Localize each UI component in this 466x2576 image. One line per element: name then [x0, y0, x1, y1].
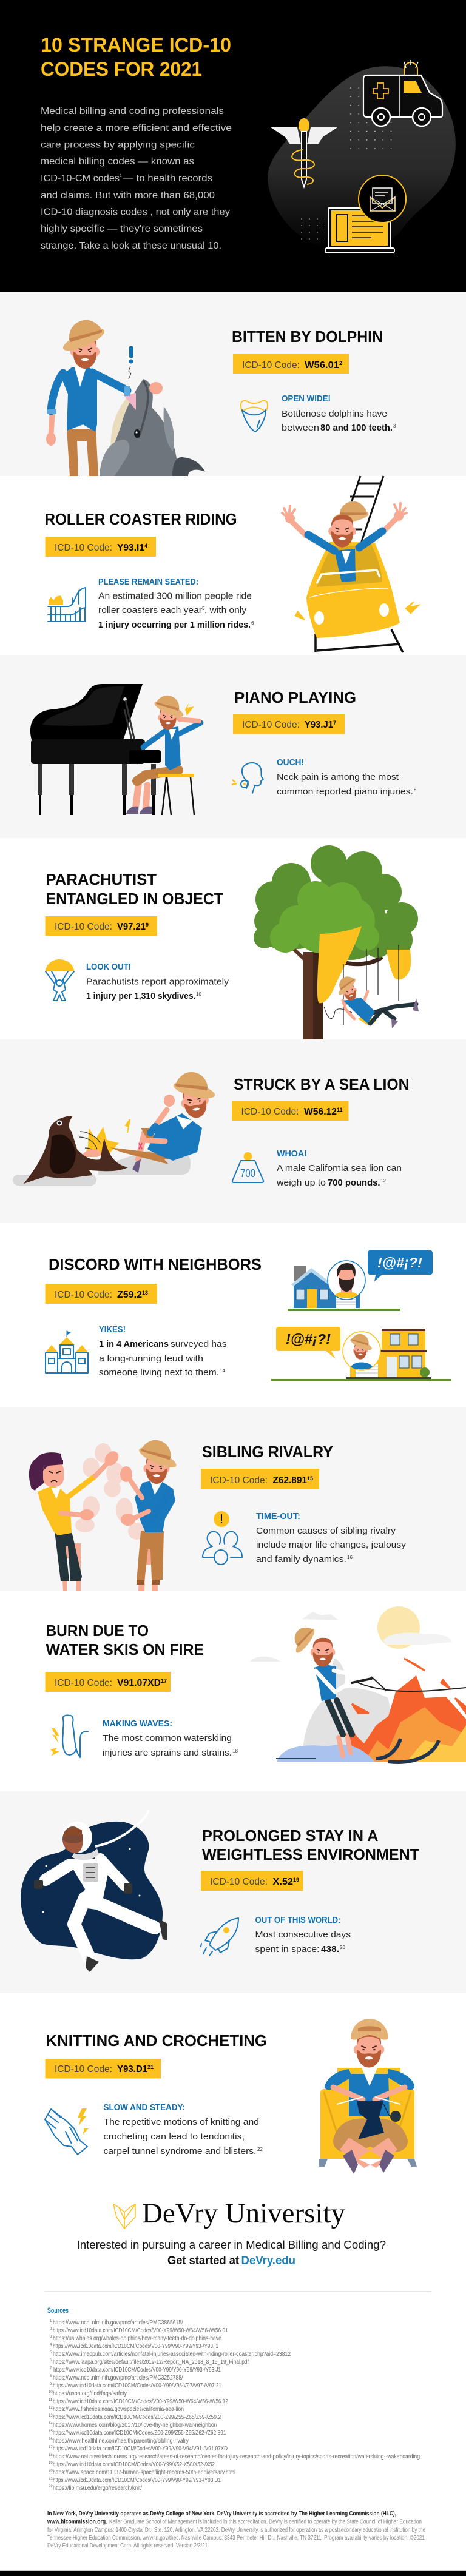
heading [46, 1622, 204, 1659]
fact text: Common causes of sibling rivalry [256, 1526, 396, 1536]
fact text: 5 [202, 606, 205, 611]
heading: ROLLER COASTER RIDING [45, 510, 237, 528]
call to action [76, 2238, 386, 2267]
sources list: 13 [49, 2414, 53, 2418]
heading: PARACHUTIST [46, 870, 157, 888]
fact text: roller coasters each year [98, 606, 202, 615]
illustration: sea lion striking man [13, 1068, 221, 1186]
illustration: man knitting in chair [319, 2019, 417, 2174]
sources list: https://www.nationwidechildrens.org/research/areas-of-research/center-for-injury-research-and-policy/injury-topics/sports-recreation/waterskiing--wakeboarding [53, 2454, 420, 2460]
heading: PIANO PLAYING [234, 688, 356, 706]
accreditation fine print: DeVry Educational Development Corp. All rights reserved. Version 2/3/21. [47, 2542, 209, 2549]
sources list: 21 [49, 2477, 53, 2481]
code badge: 13 [142, 1290, 148, 1296]
fact text: OUCH! [277, 758, 304, 768]
illustration: yellow house with man [271, 1327, 451, 1381]
heading [46, 870, 223, 908]
icon: tooth [241, 401, 268, 432]
code badge: Y93.I1 [117, 543, 144, 553]
sources list: https://www.icd10data.com/ICD10CM/Codes/V00-Y99/V95-V97/V97-/V97.21 [53, 2383, 221, 2389]
code badge [45, 1284, 157, 1304]
call to action: Get started at [167, 2255, 240, 2267]
fact text: 700 pounds. [328, 1178, 380, 1188]
sources list: 10 [49, 2390, 53, 2394]
intro text: help create a more efficient and effective [41, 123, 232, 133]
fact text: YIKES! [99, 1325, 126, 1335]
icon: siblings [203, 1511, 242, 1565]
fact text: 22 [257, 2147, 263, 2152]
logo: DeVry University: DeVry University [142, 2198, 345, 2229]
code badge [233, 714, 345, 734]
sources list [49, 2319, 420, 2492]
panel: footer [0, 2178, 466, 2576]
fact text: Bottlenose dolphins have [282, 409, 387, 419]
code badge: Y93.J1 [305, 720, 333, 730]
icon: coaster [48, 588, 86, 622]
intro text [41, 106, 232, 251]
heading: ENTANGLED IN OBJECT [46, 890, 223, 908]
sources list: https://www.ncbi.nlm.nih.gov/pmc/articles/PMC3865615/ [53, 2319, 183, 2326]
call to action: DeVry.edu [241, 2255, 295, 2267]
code badge: ICD-10 Code: [242, 360, 300, 371]
code badge [233, 354, 349, 374]
heading: BITTEN BY DOLPHIN [232, 327, 383, 346]
icon: rocket [201, 1918, 238, 1956]
intro text: ICD-10-CM codes [41, 173, 120, 184]
illustration: yellow house with man: !@#¡?! [286, 1331, 331, 1347]
sources list: https://www.icd10data.com/ICD10CM/Codes/V00-Y99/W50-W64/W56-/W56.12 [53, 2398, 228, 2405]
intro text: medical billing codes — known as [41, 156, 194, 167]
code badge: 9 [146, 922, 149, 928]
code badge: 11 [337, 1107, 343, 1113]
fact text [282, 394, 396, 433]
code badge: ICD-10 Code: [242, 720, 300, 730]
sources list: 2 [50, 2327, 52, 2331]
sources list: 18 [49, 2454, 53, 2457]
fact text: someone living next to them. [99, 1368, 219, 1378]
sources list: 16 [49, 2438, 53, 2441]
sources list: 8 [50, 2375, 52, 2378]
illustration: man at piano [30, 684, 201, 815]
sources list: https://lib.msu.edu/ergo/research/knit/ [53, 2485, 142, 2492]
fact text: SLOW AND STEADY: [103, 2103, 185, 2113]
fact text [103, 2103, 263, 2156]
sources list: https://us.whales.org/whales-dolphins/how-many-teeth-do-dolphins-have [53, 2335, 221, 2342]
illustration: astronaut in space [21, 1810, 167, 1972]
sources list: https://www.imedpub.com/articles/nonfatal-injuries-associated-with-riding-roller-coaster.php?aid=23812 [53, 2351, 291, 2358]
code badge: Z62.891 [273, 1475, 307, 1486]
code badge: V91.07XD [117, 1678, 161, 1688]
code badge: W56.12 [304, 1107, 337, 1117]
sources list: https://www.icd10data.com/ICD10CM/Codes/V00-Y99/W50-W64/W56-/W56.01 [53, 2327, 228, 2334]
icon: weight [232, 1152, 263, 1182]
illustration: siblings slapping [29, 1440, 178, 1591]
fact text: a long-running feud with [99, 1354, 203, 1364]
title: CODES FOR 2021 [41, 58, 202, 80]
background blob [268, 66, 456, 251]
code badge [45, 1672, 171, 1692]
code badge: ICD-10 Code: [55, 543, 112, 553]
icon: sprained arm [50, 1716, 88, 1757]
sources list: 1 [50, 2319, 52, 2323]
heading: WEIGHTLESS ENVIRONMENT [202, 1845, 419, 1863]
sources list: https://www.icd10data.com/ICD10CM/Codes/V00-Y99/V90-V94/V91-/V91.07XD [53, 2446, 228, 2452]
sources list: 3 [50, 2335, 52, 2339]
heading: KNITTING AND CROCHETING [46, 2031, 267, 2050]
sources list: 6 [50, 2359, 52, 2363]
fact text: surveyed has [171, 1340, 227, 1349]
fact text [99, 1325, 227, 1378]
fact text: crocheting can lead to tendonitis, [103, 2132, 245, 2142]
fact text: A male California sea lion can [277, 1164, 402, 1173]
fact text: 80 and 100 teeth. [320, 423, 393, 433]
panel: sibling rivalry [0, 1407, 466, 1591]
fact text: and family dynamics. [256, 1555, 346, 1565]
heading [202, 1826, 419, 1863]
fact text: injuries are sprains and strains. [103, 1748, 232, 1758]
fact text [277, 758, 417, 797]
icon: weight: 700 [240, 1167, 255, 1179]
sources list: https://www.space.com/11337-human-spaceflight-records-50th-anniversary.html [53, 2469, 235, 2476]
intro text: care process by applying specific [41, 139, 195, 150]
illustration: parachutist in tree [254, 845, 419, 1039]
sources list: 15 [49, 2430, 53, 2433]
intro text: — to health records [123, 173, 212, 184]
code badge: ICD-10 Code: [55, 1290, 112, 1300]
illustration: blue house with neighbor [288, 1250, 433, 1311]
panel: struck by a sea lion [0, 1039, 466, 1223]
sources list: 9 [50, 2383, 52, 2386]
code badge: ICD-10 Code: [210, 1877, 268, 1887]
sources list: 5 [50, 2351, 52, 2355]
heading: BURN DUE TO [46, 1622, 149, 1640]
fact text: TIME-OUT: [256, 1512, 300, 1521]
icon: castle [45, 1331, 89, 1373]
icon: caduceus [271, 118, 337, 187]
fact text: 12 [380, 1178, 386, 1184]
fact text: weigh up to [276, 1178, 326, 1188]
sources list: https://www.fisheries.noaa.gov/species/california-sea-lion [53, 2406, 184, 2413]
dot grids [301, 87, 393, 240]
panel: parachutist [0, 838, 466, 1039]
code badge: X.52 [273, 1877, 293, 1887]
sources list: https://www.icd10data.com/ICD10CM/Codes/V00-Y99/Y90-Y99/Y93-/Y93.J1 [53, 2367, 221, 2373]
sources list: https://www.healthline.com/health/parenting/sibling-rivalry [53, 2438, 189, 2444]
sources list: 11 [49, 2398, 53, 2402]
sources list: 7 [50, 2367, 52, 2370]
code badge: 21 [147, 2064, 154, 2070]
fact text [276, 1149, 402, 1188]
heading: WATER SKIS ON FIRE [46, 1640, 204, 1659]
fact text [86, 962, 229, 1001]
sources list: https://www.homes.com/blog/2017/10/love-thy-neighbor-war-neighbor/ [53, 2422, 217, 2429]
code badge: 15 [307, 1475, 313, 1481]
icon: head with neck pain [232, 763, 263, 793]
panel: knitting and crocheting [0, 1993, 466, 2178]
fact text: Neck pain is among the most [277, 773, 399, 782]
sources heading: Sources [47, 2307, 69, 2315]
fact text [103, 1719, 238, 1758]
fact text: spent in space: [255, 1945, 319, 1954]
code badge: V97.21 [117, 922, 146, 932]
fact text: common reported piano injuries. [277, 787, 413, 797]
sources list: 20 [49, 2469, 53, 2473]
fact text: LOOK OUT! [86, 962, 131, 972]
fact text: 438. [321, 1945, 339, 1954]
sources list: https://uspa.org/find/faqs/safety [53, 2390, 127, 2397]
code badge [232, 1101, 348, 1121]
title [41, 34, 231, 80]
sources list: https://www.icd10data.com/ICD10CM/Codes/Z00-Z99/Z55-Z65/Z62-/Z62.891 [53, 2430, 226, 2437]
sources list: 17 [49, 2446, 53, 2449]
fact text: 8 [414, 787, 417, 793]
title: 10 STRANGE ICD-10 [41, 34, 231, 56]
sources list: 4 [50, 2343, 52, 2347]
sources list: https://www.icd10data.com/ICD10CM/Codes/V00-Y99/V90-Y99/Y93-/Y93.I1 [53, 2343, 218, 2350]
code badge: 2 [339, 360, 342, 366]
icon: ambulance [363, 60, 442, 126]
intro text: Medical billing and coding professionals [41, 106, 224, 116]
fact text: 1 injury per 1,310 skydives. [86, 991, 195, 1001]
code badge: 19 [293, 1877, 299, 1883]
panel: burn due to water skis on fire [0, 1591, 466, 1791]
icon: hand with tendonitis [45, 2108, 89, 2155]
fact text: 1 injury occurring per 1 million rides. [98, 620, 251, 630]
sources list: https://www.icd10data.com/ICD10CM/Codes/V00-Y99/X52-X58/X52-/X52 [53, 2461, 215, 2468]
fact text [256, 1512, 407, 1565]
illustration: water skier on fire [250, 1606, 466, 1762]
fact text: 18 [232, 1748, 238, 1754]
code badge [201, 1469, 319, 1489]
panel: piano playing [0, 655, 466, 838]
intro text: and claims. But with more than 68,000 [41, 190, 215, 201]
fact text [98, 577, 254, 630]
fact text: 16 [347, 1555, 353, 1560]
sources list: 22 [49, 2485, 53, 2489]
panel: header [0, 0, 466, 292]
code badge: Y93.D1 [117, 2064, 147, 2075]
sources list: https://www.iaapa.org/sites/default/files/2019-12/Report_NA_2018_8_15_19_Final.pdf [53, 2359, 249, 2366]
sources list: 14 [49, 2422, 53, 2426]
panel: prolonged stay in a weightless environment [0, 1791, 466, 1993]
fact text: The repetitive motions of knitting and [103, 2118, 259, 2127]
fact text: Most consecutive days [255, 1930, 351, 1940]
sources list: https://www.icd10data.com/ICD10CM/Codes/Z00-Z99/Z55-Z65/Z59-/Z59.2 [53, 2414, 221, 2421]
fact text: MAKING WAVES: [103, 1719, 172, 1729]
intro text: 1 [120, 174, 122, 178]
fact text: The most common waterskiing [103, 1734, 232, 1743]
code badge: 4 [144, 543, 147, 549]
fact text: between [282, 423, 319, 433]
code badge: ICD-10 Code: [55, 1678, 112, 1688]
fact text: OPEN WIDE! [282, 394, 331, 404]
heading: PROLONGED STAY IN A [202, 1826, 379, 1845]
icon: laptop and envelope [325, 175, 406, 253]
code badge: ICD-10 Code: [241, 1107, 299, 1117]
sources list: https://www.ncbi.nlm.nih.gov/pmc/articles/PMC3252788/ [53, 2375, 183, 2381]
intro text: ICD-10 diagnosis codes , not only are they [41, 207, 230, 217]
sources list: 19 [49, 2461, 53, 2465]
fact text: 3 [393, 423, 396, 429]
fact text: Parachutists report approximately [86, 978, 229, 987]
fact text: 14 [220, 1368, 225, 1374]
icon: parachute [45, 959, 74, 1001]
intro text: highly specific — they're sometimes [41, 224, 203, 234]
code badge: ICD-10 Code: [210, 1475, 268, 1486]
sources list: https://www.icd10data.com/ICD10CM/Codes/V00-Y99/V90-Y99/Y93-/Y93.D1 [53, 2477, 221, 2484]
panel: discord with neighbors [0, 1223, 466, 1407]
fact text: 10 [196, 991, 201, 997]
call to action: Interested in pursuing a career in Medical Billing and Coding? [76, 2238, 386, 2251]
code badge [201, 1871, 303, 1891]
fact text: WHOA! [277, 1149, 307, 1159]
fact text: , with only [204, 606, 247, 615]
fact text: 20 [340, 1945, 345, 1950]
code badge [45, 537, 156, 557]
fact text: 6 [251, 620, 254, 626]
sources list: 12 [49, 2406, 53, 2410]
panel: roller coaster riding [0, 476, 466, 655]
code badge: ICD-10 Code: [55, 922, 112, 932]
fact text: carpel tunnel syndrome and blisters. [103, 2147, 256, 2156]
heading: SIBLING RIVALRY [202, 1443, 333, 1461]
fact text: 1 in 4 Americans [99, 1340, 169, 1349]
illustration: man on roller coaster [282, 476, 419, 652]
intro text: strange. Take a look at these unusual 10. [41, 241, 221, 251]
code badge: 17 [161, 1678, 167, 1684]
fact text [255, 1916, 351, 1954]
fact text: PLEASE REMAIN SEATED: [98, 577, 198, 587]
accreditation fine print [47, 2510, 425, 2549]
accreditation fine print: www.hlcommission.org. [47, 2518, 107, 2525]
code badge: Z59.2 [117, 1290, 142, 1300]
heading: STRUCK BY A SEA LION [234, 1075, 409, 1093]
code badge [45, 2059, 161, 2079]
heading: DISCORD WITH NEIGHBORS [49, 1255, 262, 1273]
illustration: blue house with neighbor: !@#¡?! [377, 1255, 422, 1270]
code badge [45, 916, 157, 936]
code badge: W56.01 [305, 360, 339, 371]
illustration: dolphin biting man [46, 320, 205, 476]
code badge: ICD-10 Code: [55, 2064, 112, 2075]
panel: bitten by dolphin [0, 292, 466, 476]
fact text: OUT OF THIS WORLD: [255, 1916, 341, 1925]
fact text: include major life changes, jealousy [256, 1540, 407, 1550]
fact text: An estimated 300 million people ride [98, 592, 252, 602]
code badge: 7 [333, 720, 336, 726]
